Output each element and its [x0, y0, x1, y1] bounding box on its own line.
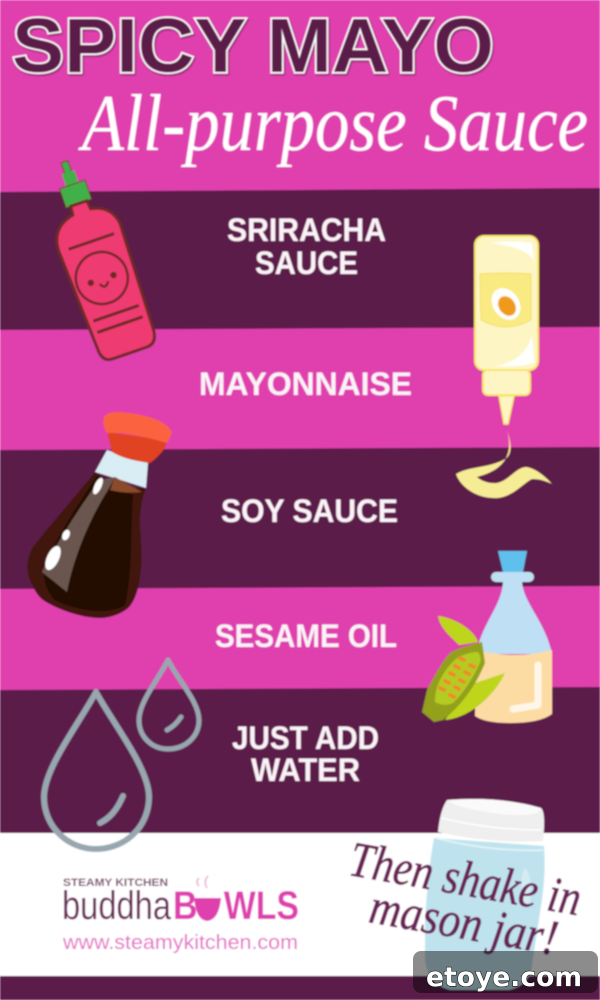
label: sesame oil: SESAME OIL [215, 618, 397, 654]
band: water [0, 687, 600, 834]
label: just add water [232, 720, 379, 788]
icon: mayonnaise bottle [456, 236, 552, 498]
logo: steamy kitchen buddha bowls [62, 876, 299, 954]
band: soy sauce [0, 447, 600, 589]
watermark: etoye.com [413, 951, 598, 993]
label: just add water: WATER [251, 752, 360, 788]
logo url: www.steamykitchen.com [62, 932, 298, 954]
panel: white footer [0, 833, 600, 976]
logo word: buddha: buddha [62, 884, 172, 928]
title: Spicy Mayo: SPICY MAYO [12, 3, 494, 89]
label: sriracha sauce: SAUCE [255, 245, 358, 281]
label: sriracha sauce: SRIRACHA [227, 212, 386, 248]
logo line: steamy kitchen: STEAMY KITCHEN [63, 877, 168, 889]
text: then shake in mason jar: mason jar! [366, 878, 562, 966]
label: soy sauce: SOY SAUCE [221, 493, 398, 529]
icon: soy sauce bottle [27, 412, 172, 618]
icon: mason jar [425, 799, 545, 990]
label: just add water: JUST ADD [232, 720, 379, 756]
icon: sriracha bottle [32, 151, 161, 364]
text: then shake in mason jar [338, 830, 586, 969]
watermark: etoye.com: etoye.com [426, 962, 582, 993]
label: sriracha sauce [227, 212, 386, 281]
logo icon: bowl [194, 876, 221, 921]
band: bottom [0, 976, 600, 1000]
icon: small water drop [139, 660, 199, 749]
icon: large water drop [44, 692, 149, 849]
icon: sesame oil bottle with corn [422, 551, 552, 723]
label: mayonnaise: MAYONNAISE [199, 366, 412, 402]
logo word: bowls: BOWLS [173, 884, 299, 928]
band: sriracha [0, 188, 600, 330]
